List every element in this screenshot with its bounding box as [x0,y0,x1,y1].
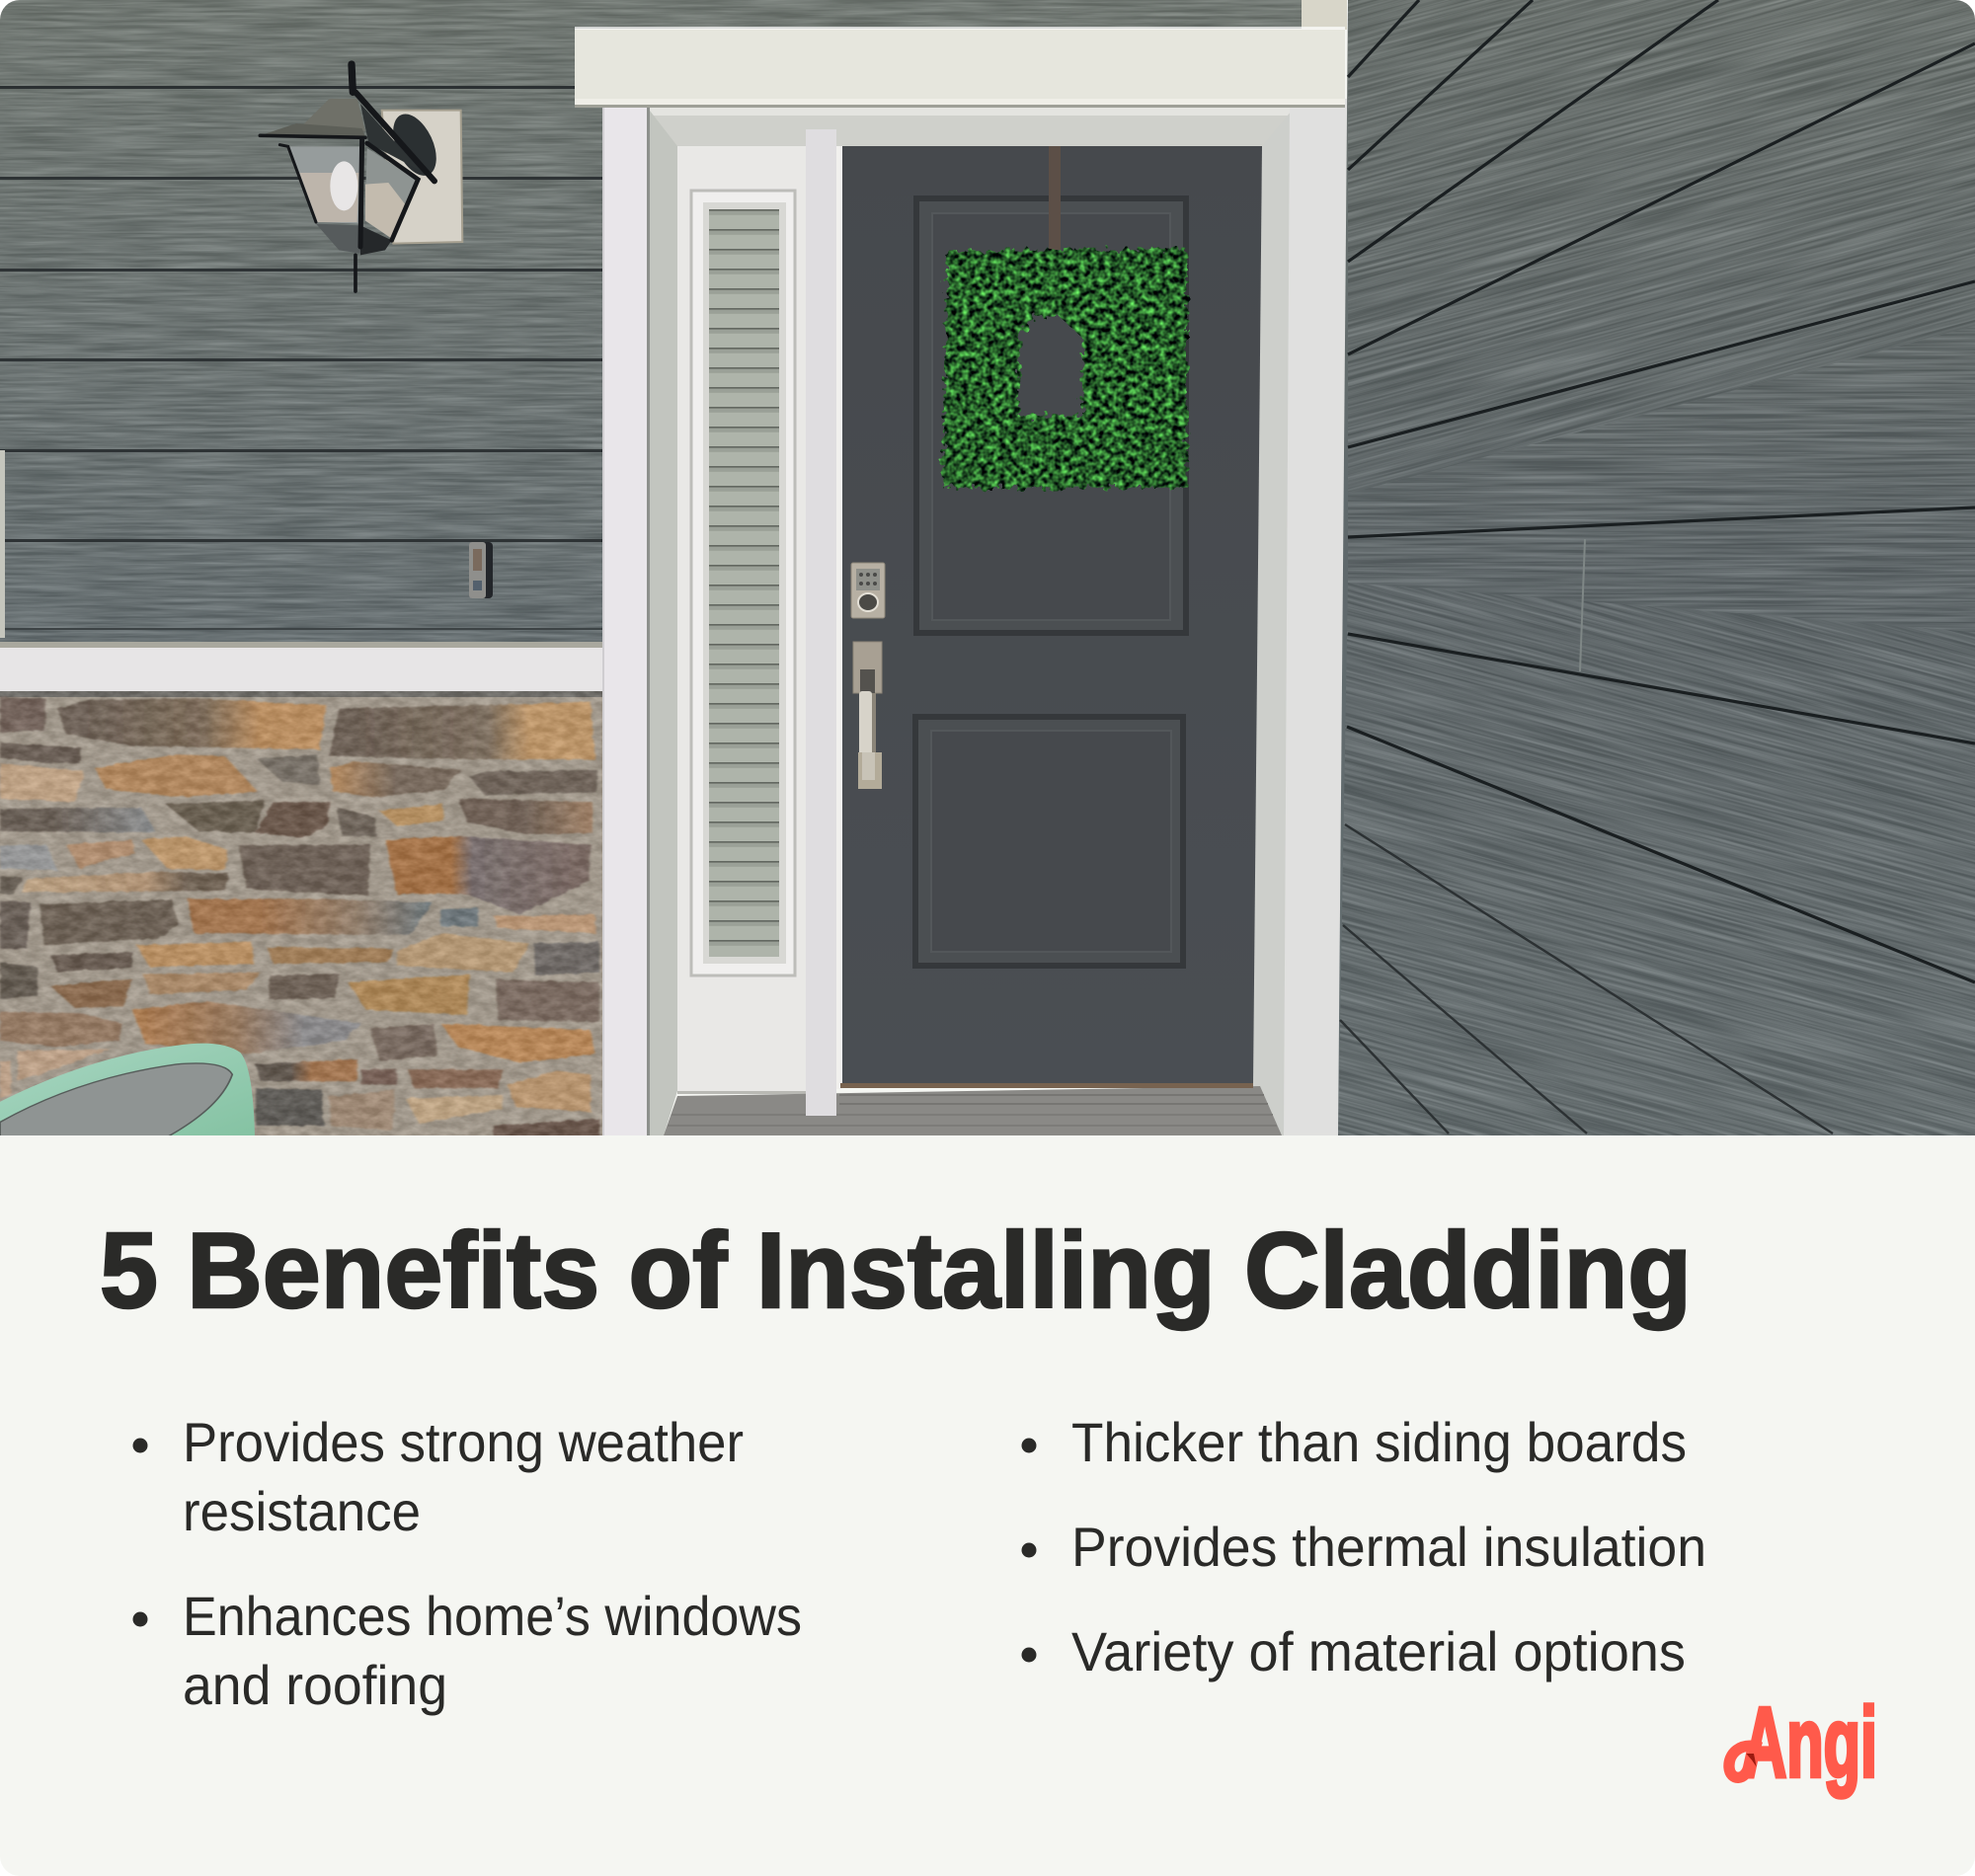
door handle [853,642,882,789]
benefit: weather resistance: Provides strong weather [183,1411,744,1473]
left column benefits list [132,1411,802,1716]
door upper panel [913,195,1189,636]
Angi logo [1729,1687,1877,1798]
electronic keypad lock [851,563,885,618]
front door [836,146,1262,1089]
right column benefits list [1021,1411,1706,1682]
photo: front entry with grey cladding [0,0,1975,1135]
Angi logo: Angi [1743,1687,1877,1798]
title: 5 Benefits of Installing Cladding [100,1211,1692,1331]
benefit: enhances windows and roofing: Enhances home’s windows [183,1585,802,1647]
panel: stone veneer [0,686,604,1139]
wall lantern [260,64,462,291]
benefit: enhances windows and roofing [132,1585,802,1716]
white trim band above stone [0,648,604,691]
sidelight with blinds [677,146,806,1094]
video doorbell [469,542,493,598]
right siding wall [1338,0,1975,1135]
door frame and pilasters [602,0,1349,1135]
door lower panel [912,714,1186,969]
benefit: material options: Variety of material options [1071,1620,1686,1682]
door lintel [575,27,1345,108]
benefit: thermal insulation: Provides thermal insulation [1071,1516,1706,1578]
door threshold floor [664,1086,1282,1135]
benefit: thicker than siding: Thicker than siding boards [1071,1411,1687,1473]
mullion post [806,129,836,1116]
panel: left siding wall [0,0,1315,652]
benefit: enhances windows and roofing: and roofing [183,1654,447,1716]
planter pot [0,1044,255,1139]
wreath hanger strap [1049,146,1061,250]
benefit: weather resistance [132,1411,744,1542]
benefit: weather resistance: resistance [183,1480,421,1542]
green square wreath [942,249,1187,488]
